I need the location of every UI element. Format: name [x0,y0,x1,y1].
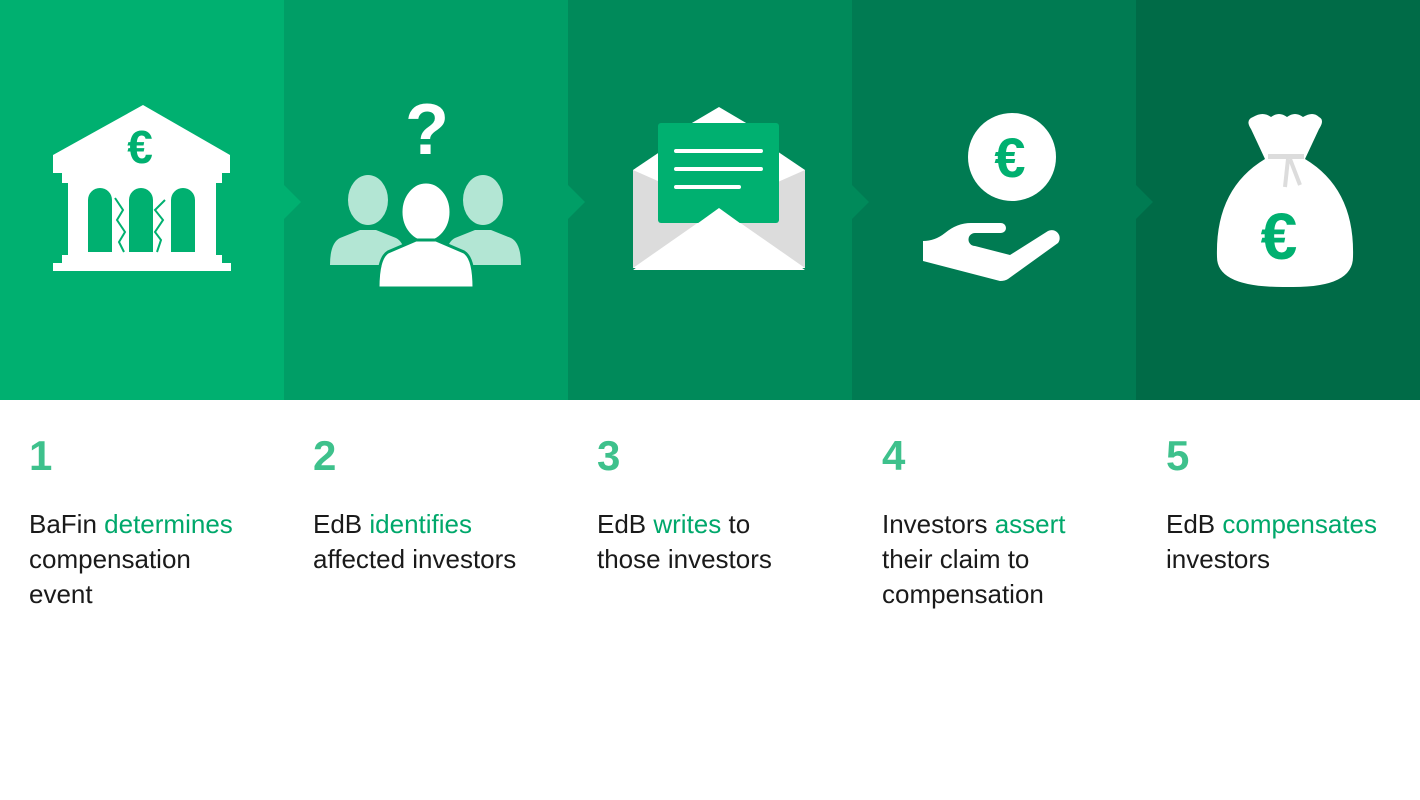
icon: bank [53,105,231,271]
icon: bank: € [127,121,153,173]
step 4 text: Investors assert their claim to compensation [882,509,1066,609]
top band with icons [0,0,1420,400]
step 2 text: EdB identifies affected investors [313,509,516,574]
icon: people with question mark: ? [405,90,449,170]
panel 4 [852,0,1136,400]
icon: people with question mark [330,90,521,288]
step 1 number: 1 [29,432,52,479]
step 1 text: BaFin determines compensation event [29,509,233,609]
step 4 number: 4 [882,432,905,479]
step 3 text: EdB writes to those investors [597,509,772,574]
icon: envelope [633,107,805,270]
step 2 number: 2 [313,432,336,479]
icon: hand with coin: € [994,126,1026,189]
icon: hand with coin [923,113,1060,281]
icon: money bag [1217,114,1353,287]
arrow 1 [283,184,301,220]
panel 3 [568,0,852,400]
panel 2 [284,0,568,400]
step 5 text: EdB compensates investors [1166,509,1377,574]
arrow 2 [567,184,585,220]
step 3 number: 3 [597,432,620,479]
arrow 4 [1135,184,1153,220]
panel 1 [0,0,284,400]
arrow 3 [851,184,869,220]
step 5 number: 5 [1166,432,1189,479]
panel 5 [1136,0,1420,400]
icon: money bag: € [1261,199,1297,273]
